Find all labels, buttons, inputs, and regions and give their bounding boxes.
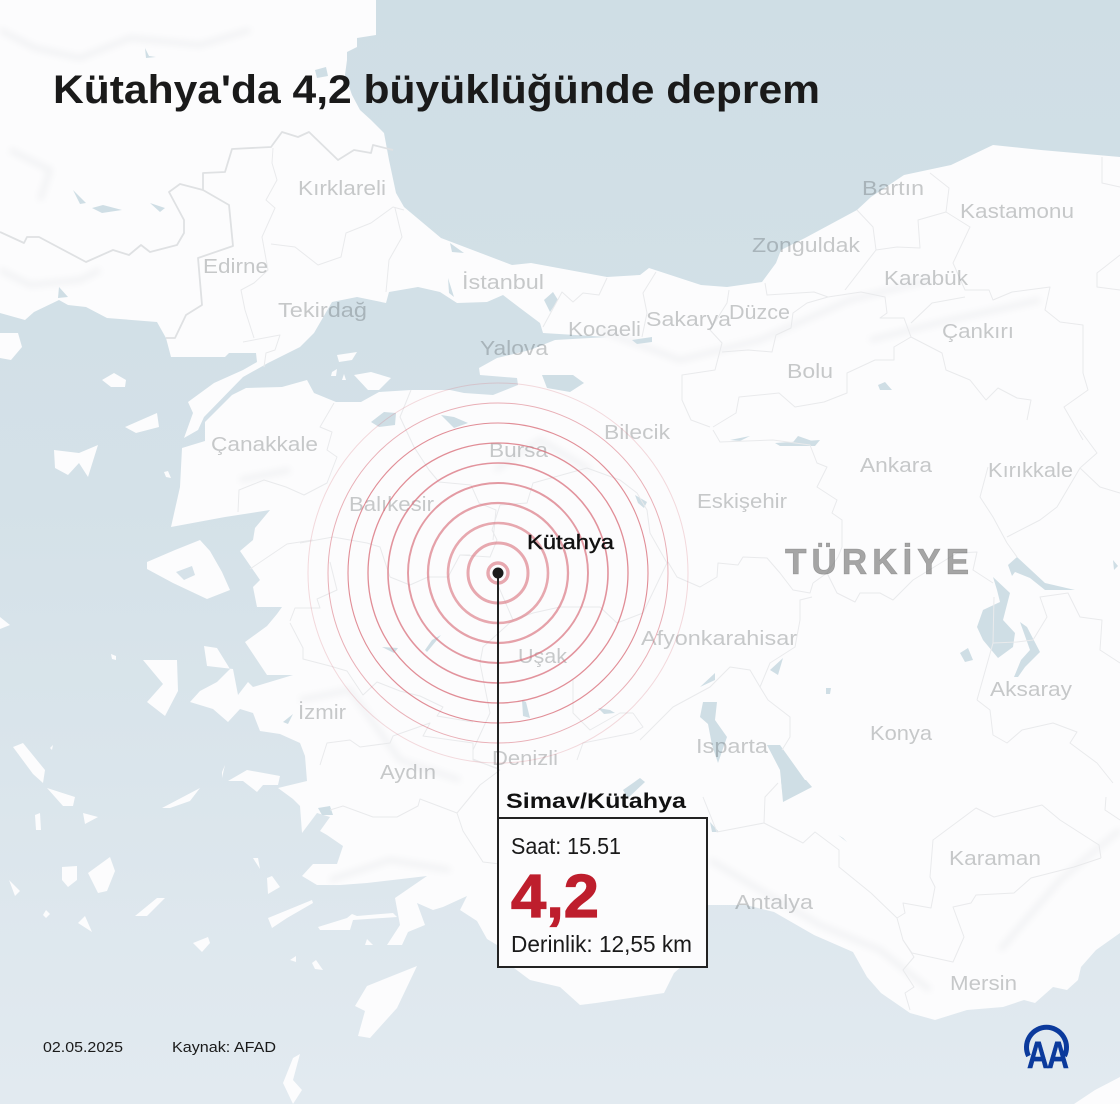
province borders bbox=[238, 148, 1120, 1010]
label: Bartın: Bartın bbox=[862, 178, 924, 200]
inland water: lakes and reservoirs bbox=[58, 48, 1118, 842]
land: north Aegean and Marmara islands bbox=[0, 333, 391, 918]
label: Karabük: Karabük bbox=[884, 268, 969, 290]
label: Ankara: Ankara bbox=[860, 455, 933, 477]
national borders bbox=[0, 132, 393, 338]
label: Balıkesir: Balıkesir bbox=[349, 494, 434, 516]
label: Aksaray: Aksaray bbox=[990, 679, 1072, 701]
callout heading: Simav/Kütahya bbox=[506, 790, 686, 813]
land: Cyprus tip bbox=[1074, 1077, 1120, 1104]
label: Zonguldak: Zonguldak bbox=[752, 235, 861, 257]
source: Kaynak: AFAD bbox=[172, 1040, 276, 1056]
leader line bbox=[497, 573, 499, 818]
epicentre dot bbox=[492, 568, 504, 578]
title: Kütahya'da 4,2 büyüklüğünde deprem bbox=[53, 68, 820, 112]
label: Bilecik: Bilecik bbox=[604, 422, 671, 444]
province labels bbox=[203, 178, 1074, 995]
label: Isparta: Isparta bbox=[696, 736, 769, 758]
country label: TÜRKİYE: TÜRKİYE bbox=[785, 541, 974, 582]
label: Bursa: Bursa bbox=[489, 440, 549, 462]
label: Edirne: Edirne bbox=[203, 256, 268, 278]
label: Tekirdağ: Tekirdağ bbox=[278, 300, 367, 322]
label: İzmir: İzmir bbox=[298, 701, 346, 724]
label: Çanakkale: Çanakkale bbox=[211, 434, 318, 456]
label: Düzce: Düzce bbox=[729, 302, 790, 324]
label: Kırıkkale: Kırıkkale bbox=[988, 460, 1073, 482]
depth: Derinlik: 12,55 km bbox=[511, 931, 692, 957]
callout box bbox=[498, 818, 707, 967]
label: Uşak: Uşak bbox=[518, 646, 568, 668]
magnitude: 4,2 bbox=[511, 862, 599, 930]
label: İstanbul: İstanbul bbox=[462, 271, 544, 294]
label: Kocaeli: Kocaeli bbox=[568, 319, 641, 341]
label: Denizli: Denizli bbox=[492, 748, 558, 770]
label: Eskişehir: Eskişehir bbox=[697, 491, 787, 513]
label: Mersin: Mersin bbox=[950, 973, 1017, 995]
label: Kırklareli: Kırklareli bbox=[298, 178, 386, 200]
label: Kütahya: Kütahya bbox=[527, 532, 615, 554]
land: Lesbos bbox=[147, 540, 230, 599]
time: Saat: 15.51 bbox=[511, 833, 621, 859]
earthquake rings bbox=[308, 383, 688, 763]
label: Kastamonu: Kastamonu bbox=[960, 201, 1074, 223]
label: Aydın: Aydın bbox=[380, 762, 436, 784]
date: 02.05.2025 bbox=[43, 1040, 123, 1056]
label: Sakarya: Sakarya bbox=[646, 309, 732, 331]
label: Afyonkarahisar: Afyonkarahisar bbox=[641, 628, 797, 650]
label: Antalya: Antalya bbox=[735, 892, 814, 914]
label: Konya: Konya bbox=[870, 723, 933, 745]
label: Karaman: Karaman bbox=[949, 848, 1041, 870]
icon: AA logo: AA bbox=[1027, 1035, 1068, 1077]
label: Çankırı: Çankırı bbox=[942, 321, 1014, 343]
label: Bolu: Bolu bbox=[787, 361, 833, 383]
label: Yalova: Yalova bbox=[480, 338, 549, 360]
land: central and south Aegean islands bbox=[0, 617, 417, 1104]
callout: earthquake details bbox=[498, 790, 707, 967]
